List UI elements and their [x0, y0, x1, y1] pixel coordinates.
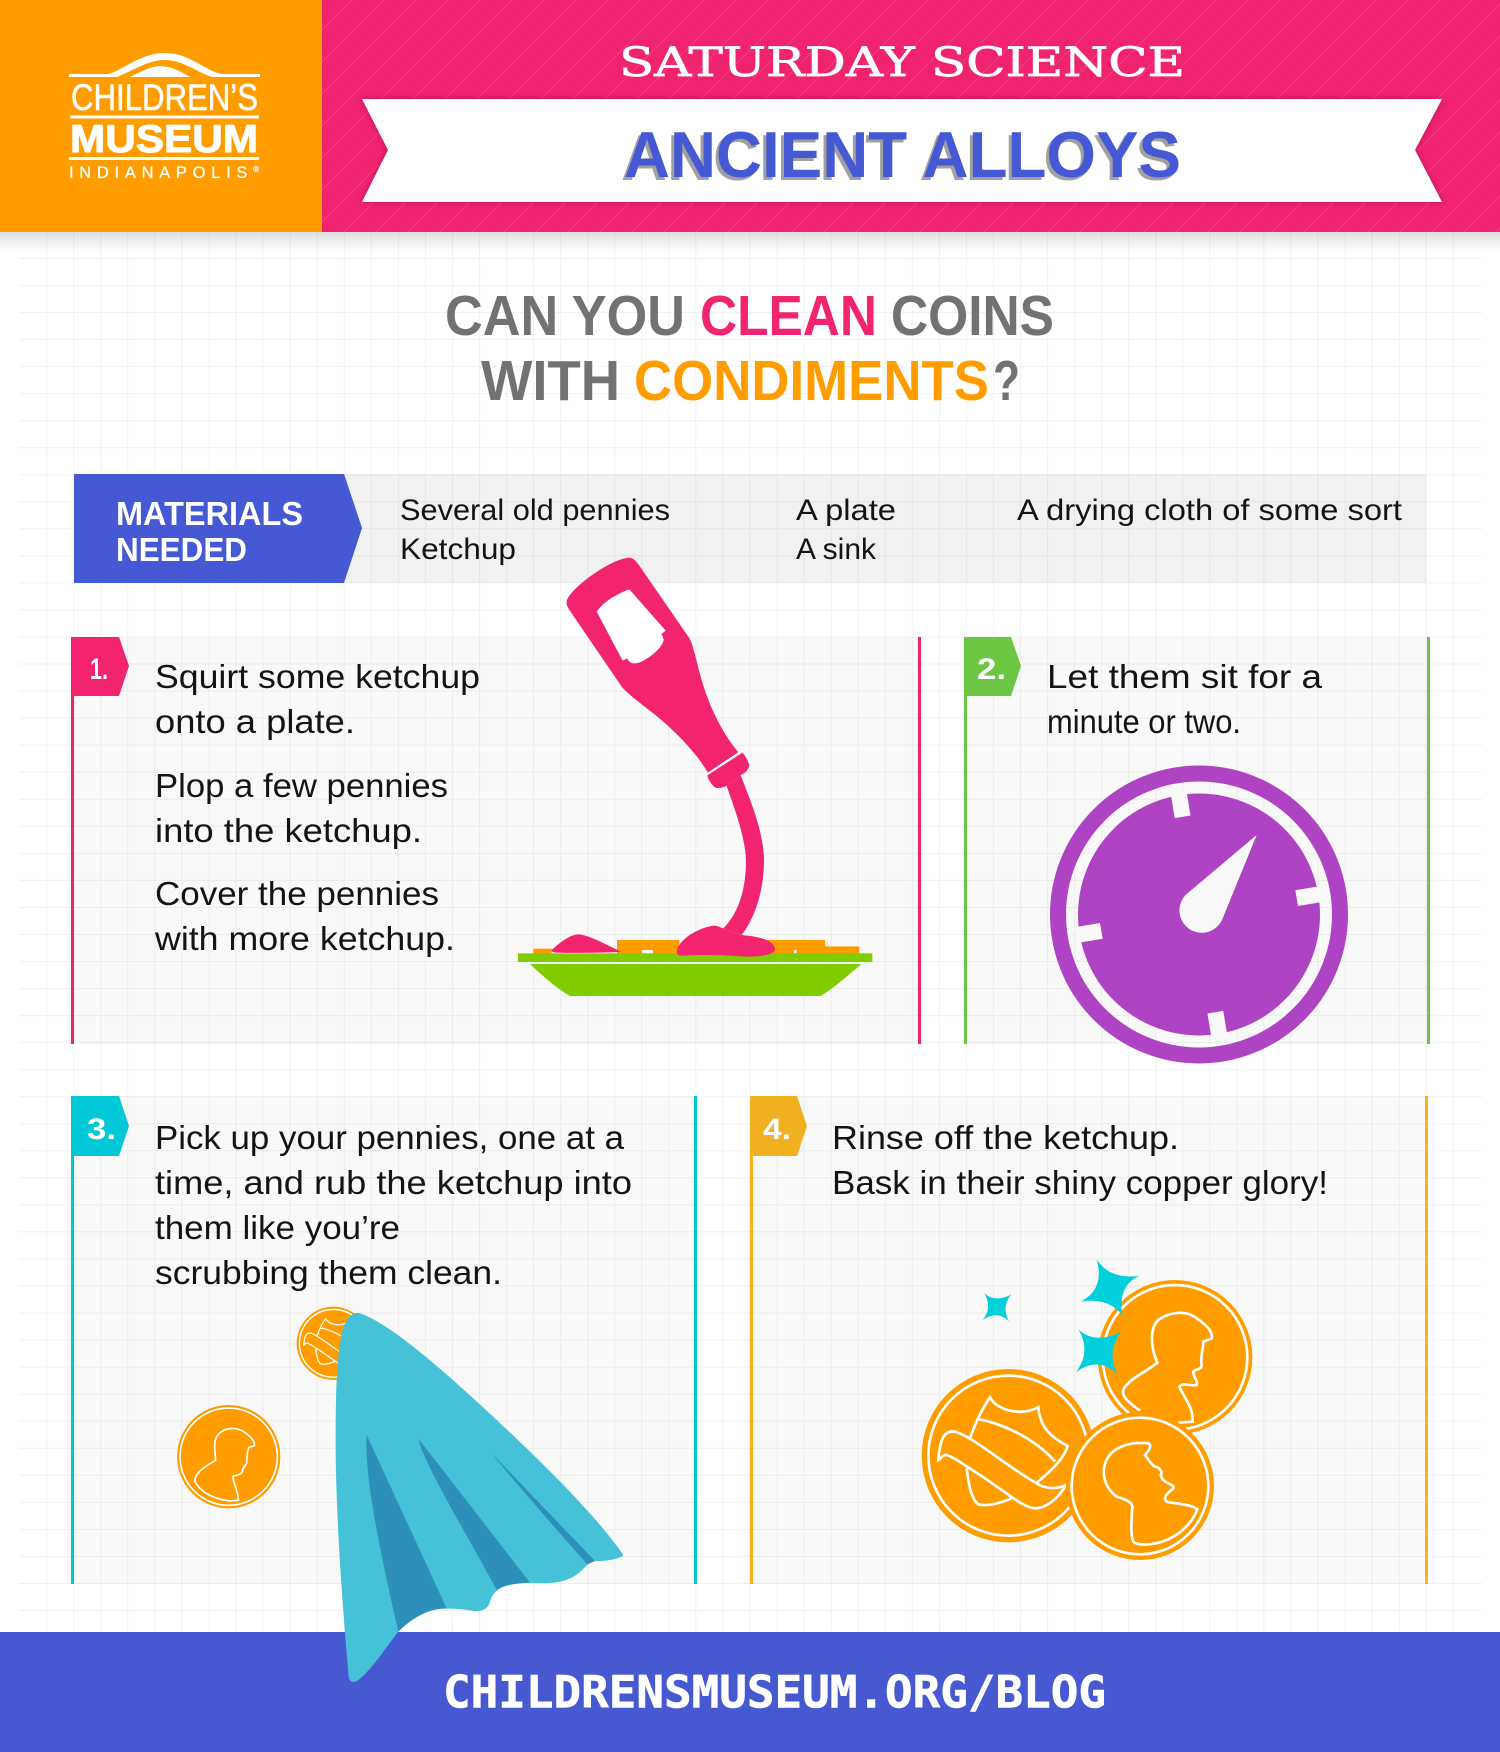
heading: can you clean coins with condiments: COINS [891, 284, 1054, 348]
text: step 3 instructions: scrubbing them clean. [155, 1254, 502, 1291]
badge: step 3: 3. [87, 1113, 116, 1146]
materials list: Several old pennies [400, 494, 670, 527]
heading: can you clean coins with condiments: CONDIMENTS [634, 349, 989, 413]
badge: step 2: 2. [977, 653, 1006, 686]
badge: step 2 [964, 637, 1021, 696]
materials list [400, 494, 1402, 566]
heading: can you clean coins with condiments: ? [993, 349, 1020, 413]
icon: purple timer [1058, 774, 1340, 1056]
text: step 1 instructions: Squirt some ketchup [155, 658, 480, 695]
panel: step 2 [964, 637, 1430, 1056]
panel: step 1 [71, 558, 921, 1044]
text: step 4 instructions: Bask in their shiny copper glory! [832, 1164, 1328, 1201]
text: step 3 instructions [155, 1119, 632, 1291]
text: step 3 instructions: time, and rub the ketchup into [155, 1164, 632, 1201]
ribbon banner [362, 99, 1442, 202]
text: step 2 instructions: minute or two. [1047, 703, 1241, 740]
footer [0, 1632, 1500, 1752]
logo: Children's Museum Indianapolis: ® [253, 165, 259, 174]
text: step 4 instructions [832, 1119, 1328, 1201]
materials label: NEEDED [116, 531, 247, 568]
badge: step 1: 1. [90, 653, 108, 686]
panel: step 3 [71, 1096, 697, 1584]
title: Ancient Alloys: ANCIENT ALLOYS [621, 122, 1178, 194]
badge: step 4 [750, 1096, 807, 1156]
logo: Children's Museum Indianapolis [69, 53, 260, 182]
panel: step 4 [750, 1096, 1428, 1584]
logo: Children's Museum Indianapolis: CHILDREN’S [71, 77, 258, 118]
panel: header pink banner [322, 0, 1500, 232]
penny: top right portrait [1098, 1280, 1252, 1435]
text: step 1 instructions: Cover the pennies [155, 875, 439, 912]
text: step 1 instructions: Plop a few pennies [155, 767, 448, 804]
materials label [74, 474, 362, 583]
text: step 2 instructions [1047, 658, 1323, 740]
heading: can you clean coins with condiments: CAN YOU [445, 284, 685, 348]
materials list: A plate [796, 494, 896, 527]
text: step 1 instructions: with more ketchup. [154, 920, 455, 957]
heading: can you clean coins with condiments [445, 284, 1054, 413]
materials list: A drying cloth of some sort [1017, 494, 1402, 527]
illustration: ketchup bottle squirting on plate [518, 558, 872, 996]
text: step 4 instructions: Rinse off the ketchup. [832, 1119, 1179, 1156]
text: step 3 instructions: Pick up your pennies, one at a [155, 1119, 625, 1156]
icon: penny with portrait [177, 1405, 280, 1508]
badge: step 1 [71, 637, 129, 696]
text: step 3 instructions: them like you’re [155, 1209, 400, 1246]
illustration: shiny pennies and sparkles [922, 1259, 1252, 1560]
panel: materials needed [74, 474, 1426, 583]
illustration: blue cloth [336, 1313, 623, 1682]
badge: step 4: 4. [763, 1113, 791, 1146]
materials list: Ketchup [400, 533, 516, 566]
text: step 1 instructions: into the ketchup. [155, 812, 422, 849]
badge: step 3 [71, 1096, 129, 1156]
text: step 2 instructions: Let them sit for a [1047, 658, 1323, 695]
penny: bottom portrait [1066, 1412, 1214, 1560]
text: step 1 instructions [154, 658, 480, 957]
penny: shield [922, 1369, 1095, 1542]
panel: logo block [0, 0, 322, 232]
heading: can you clean coins with condiments: CLEAN [700, 284, 877, 348]
sparkles [983, 1259, 1139, 1374]
header [0, 0, 1500, 232]
footer url: CHILDRENSMUSEUM.ORG/BLOG [443, 1668, 1106, 1718]
materials label: MATERIALS [116, 495, 303, 532]
heading: Saturday Science: SATURDAY SCIENCE [619, 40, 1185, 86]
title: Ancient Alloys: ANCIENT ALLOYS [624, 119, 1181, 191]
text: step 1 instructions: onto a plate. [155, 703, 355, 740]
logo: Children's Museum Indianapolis: MUSEUM [70, 118, 258, 161]
heading: can you clean coins with condiments: WITH [481, 349, 620, 413]
icon: penny with shield [297, 1307, 370, 1380]
logo: Children's Museum Indianapolis: INDIANAPOLIS [69, 164, 247, 182]
materials list: A sink [796, 533, 876, 566]
